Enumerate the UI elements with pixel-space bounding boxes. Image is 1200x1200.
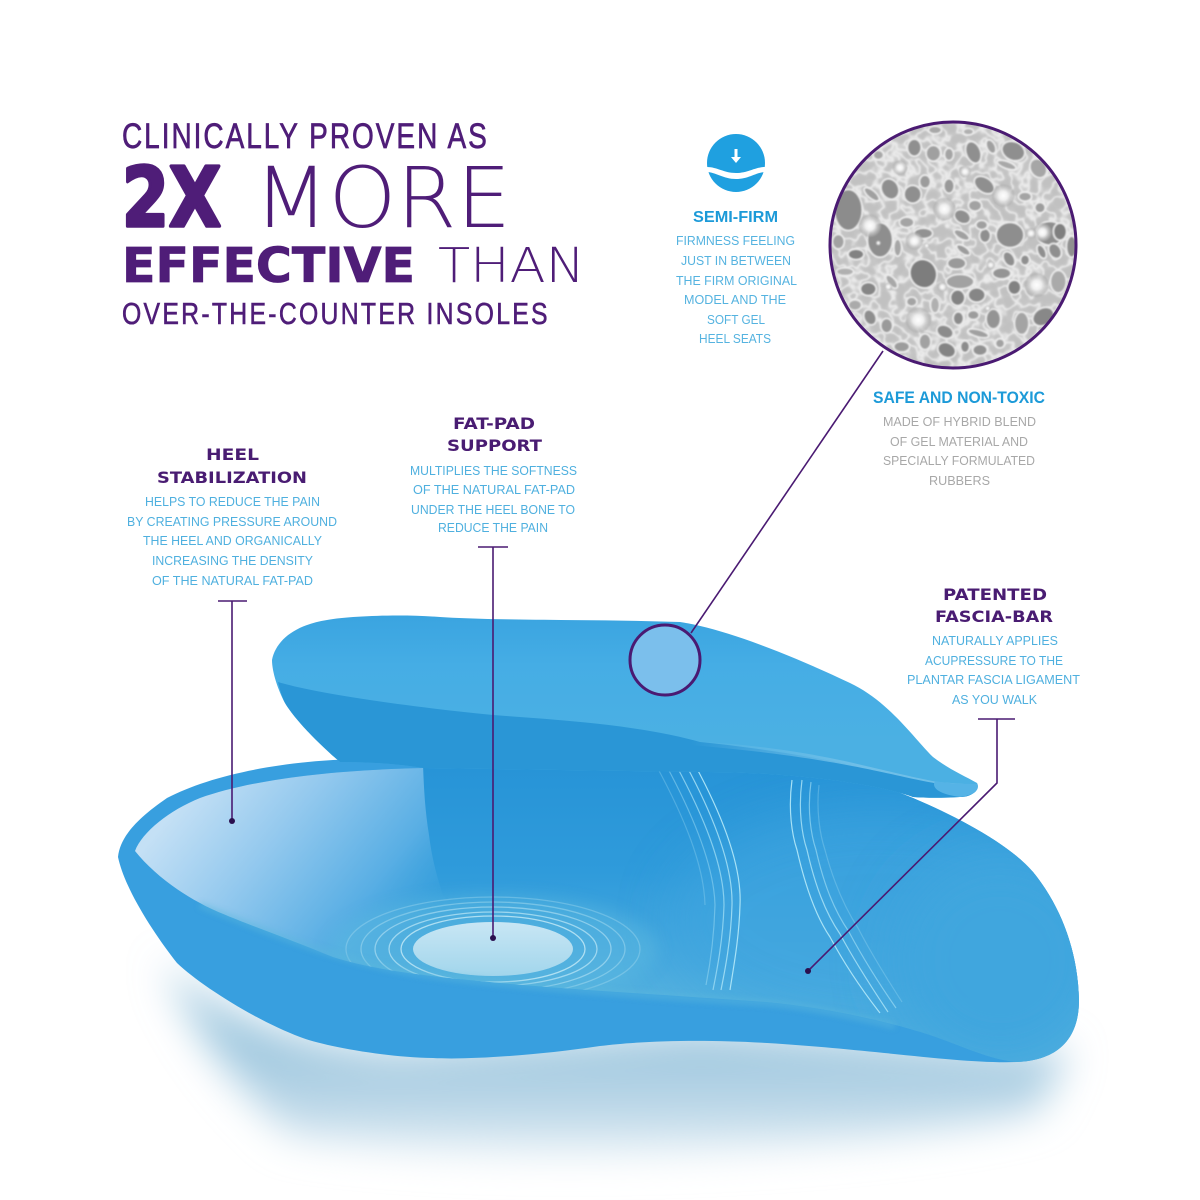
- insole: lower front insole: [118, 740, 1110, 1070]
- text: patented fascia-bar: NATURALLY APPLIES: [932, 633, 1058, 648]
- title: clinically proven headline: EFFECTIVE: [122, 238, 415, 294]
- heel cup inner surface: [120, 740, 1110, 1070]
- front rim highlight: [200, 905, 895, 1026]
- text: safe and non-toxic: SAFE AND NON-TOXIC: [873, 388, 1045, 407]
- text: patented fascia-bar: [907, 585, 1080, 707]
- text: fat-pad support: REDUCE THE PAIN: [438, 520, 548, 535]
- ground shadow under insole: [165, 960, 1068, 1153]
- leader: fat-pad support: [478, 547, 508, 941]
- text: semi-firm: [676, 209, 797, 346]
- text: safe and non-toxic: OF GEL MATERIAL AND: [890, 434, 1028, 449]
- underside band: [278, 682, 974, 798]
- icon: semi-firm pressure: [706, 134, 766, 192]
- text: fat-pad support: MULTIPLIES THE SOFTNESS: [410, 463, 577, 478]
- text: heel stabilization: HEEL: [206, 445, 259, 464]
- text: patented fascia-bar: AS YOU WALK: [952, 692, 1037, 707]
- text: safe and non-toxic: SPECIALLY FORMULATED: [883, 453, 1035, 468]
- title: clinically proven headline: MORE: [254, 149, 511, 247]
- callout: zoom circle on upper insole: [630, 351, 883, 695]
- text: heel stabilization: INCREASING THE DENSITY: [152, 553, 313, 568]
- text: semi-firm: HEEL SEATS: [699, 331, 771, 346]
- text: fat-pad support: FAT-PAD: [453, 414, 535, 433]
- tip highlight stripe: [690, 741, 978, 792]
- leader: heel stabilization: [218, 601, 247, 824]
- text: heel stabilization: STABILIZATION: [157, 468, 307, 487]
- text: heel stabilization: OF THE NATURAL FAT-PAD: [152, 573, 313, 588]
- title: clinically proven headline: 2X: [122, 151, 221, 246]
- text: semi-firm: FIRMNESS FEELING: [676, 233, 795, 248]
- text: semi-firm: SOFT GEL: [707, 312, 765, 327]
- text: semi-firm: THE FIRM ORIGINAL: [676, 273, 797, 288]
- leader: patented fascia-bar: [805, 719, 1015, 974]
- text: safe and non-toxic: MADE OF HYBRID BLEND: [883, 414, 1036, 429]
- text: patented fascia-bar: ACUPRESSURE TO THE: [925, 653, 1063, 668]
- text: heel stabilization: THE HEEL AND ORGANICALLY: [143, 533, 322, 548]
- text: heel stabilization: [127, 445, 337, 588]
- text: patented fascia-bar: PLANTAR FASCIA LIGAMENT: [907, 672, 1080, 687]
- title: clinically proven headline: OVER-THE-COUNTER INSOLES: [122, 296, 548, 331]
- foam texture magnifier circle: [825, 117, 1081, 373]
- fat-pad disc: [413, 922, 573, 976]
- title: clinically proven headline: CLINICALLY PROVEN AS: [122, 116, 487, 156]
- text: fat-pad support: [410, 414, 577, 535]
- text: fat-pad support: OF THE NATURAL FAT-PAD: [413, 482, 575, 497]
- title: clinically proven headline: THAN: [438, 238, 585, 294]
- text: semi-firm: SEMI-FIRM: [693, 209, 778, 226]
- text: semi-firm: MODEL AND THE: [684, 292, 786, 307]
- title: clinically proven headline: [122, 116, 585, 331]
- text: heel stabilization: HELPS TO REDUCE THE PAIN: [145, 494, 320, 509]
- text: semi-firm: JUST IN BETWEEN: [681, 253, 791, 268]
- text: fat-pad support: UNDER THE HEEL BONE TO: [411, 502, 575, 517]
- text: safe and non-toxic: [873, 388, 1045, 488]
- text: fat-pad support: SUPPORT: [447, 436, 542, 455]
- text: patented fascia-bar: PATENTED: [943, 585, 1047, 604]
- text: heel stabilization: BY CREATING PRESSURE AROUND: [127, 514, 337, 529]
- text: safe and non-toxic: RUBBERS: [929, 473, 990, 488]
- fat-pad rings: [346, 897, 640, 1001]
- fascia arcs right: [790, 780, 902, 1013]
- insole: upper rear insole: [272, 616, 978, 798]
- fascia arcs left: [657, 765, 740, 990]
- text: patented fascia-bar: FASCIA-BAR: [935, 607, 1053, 626]
